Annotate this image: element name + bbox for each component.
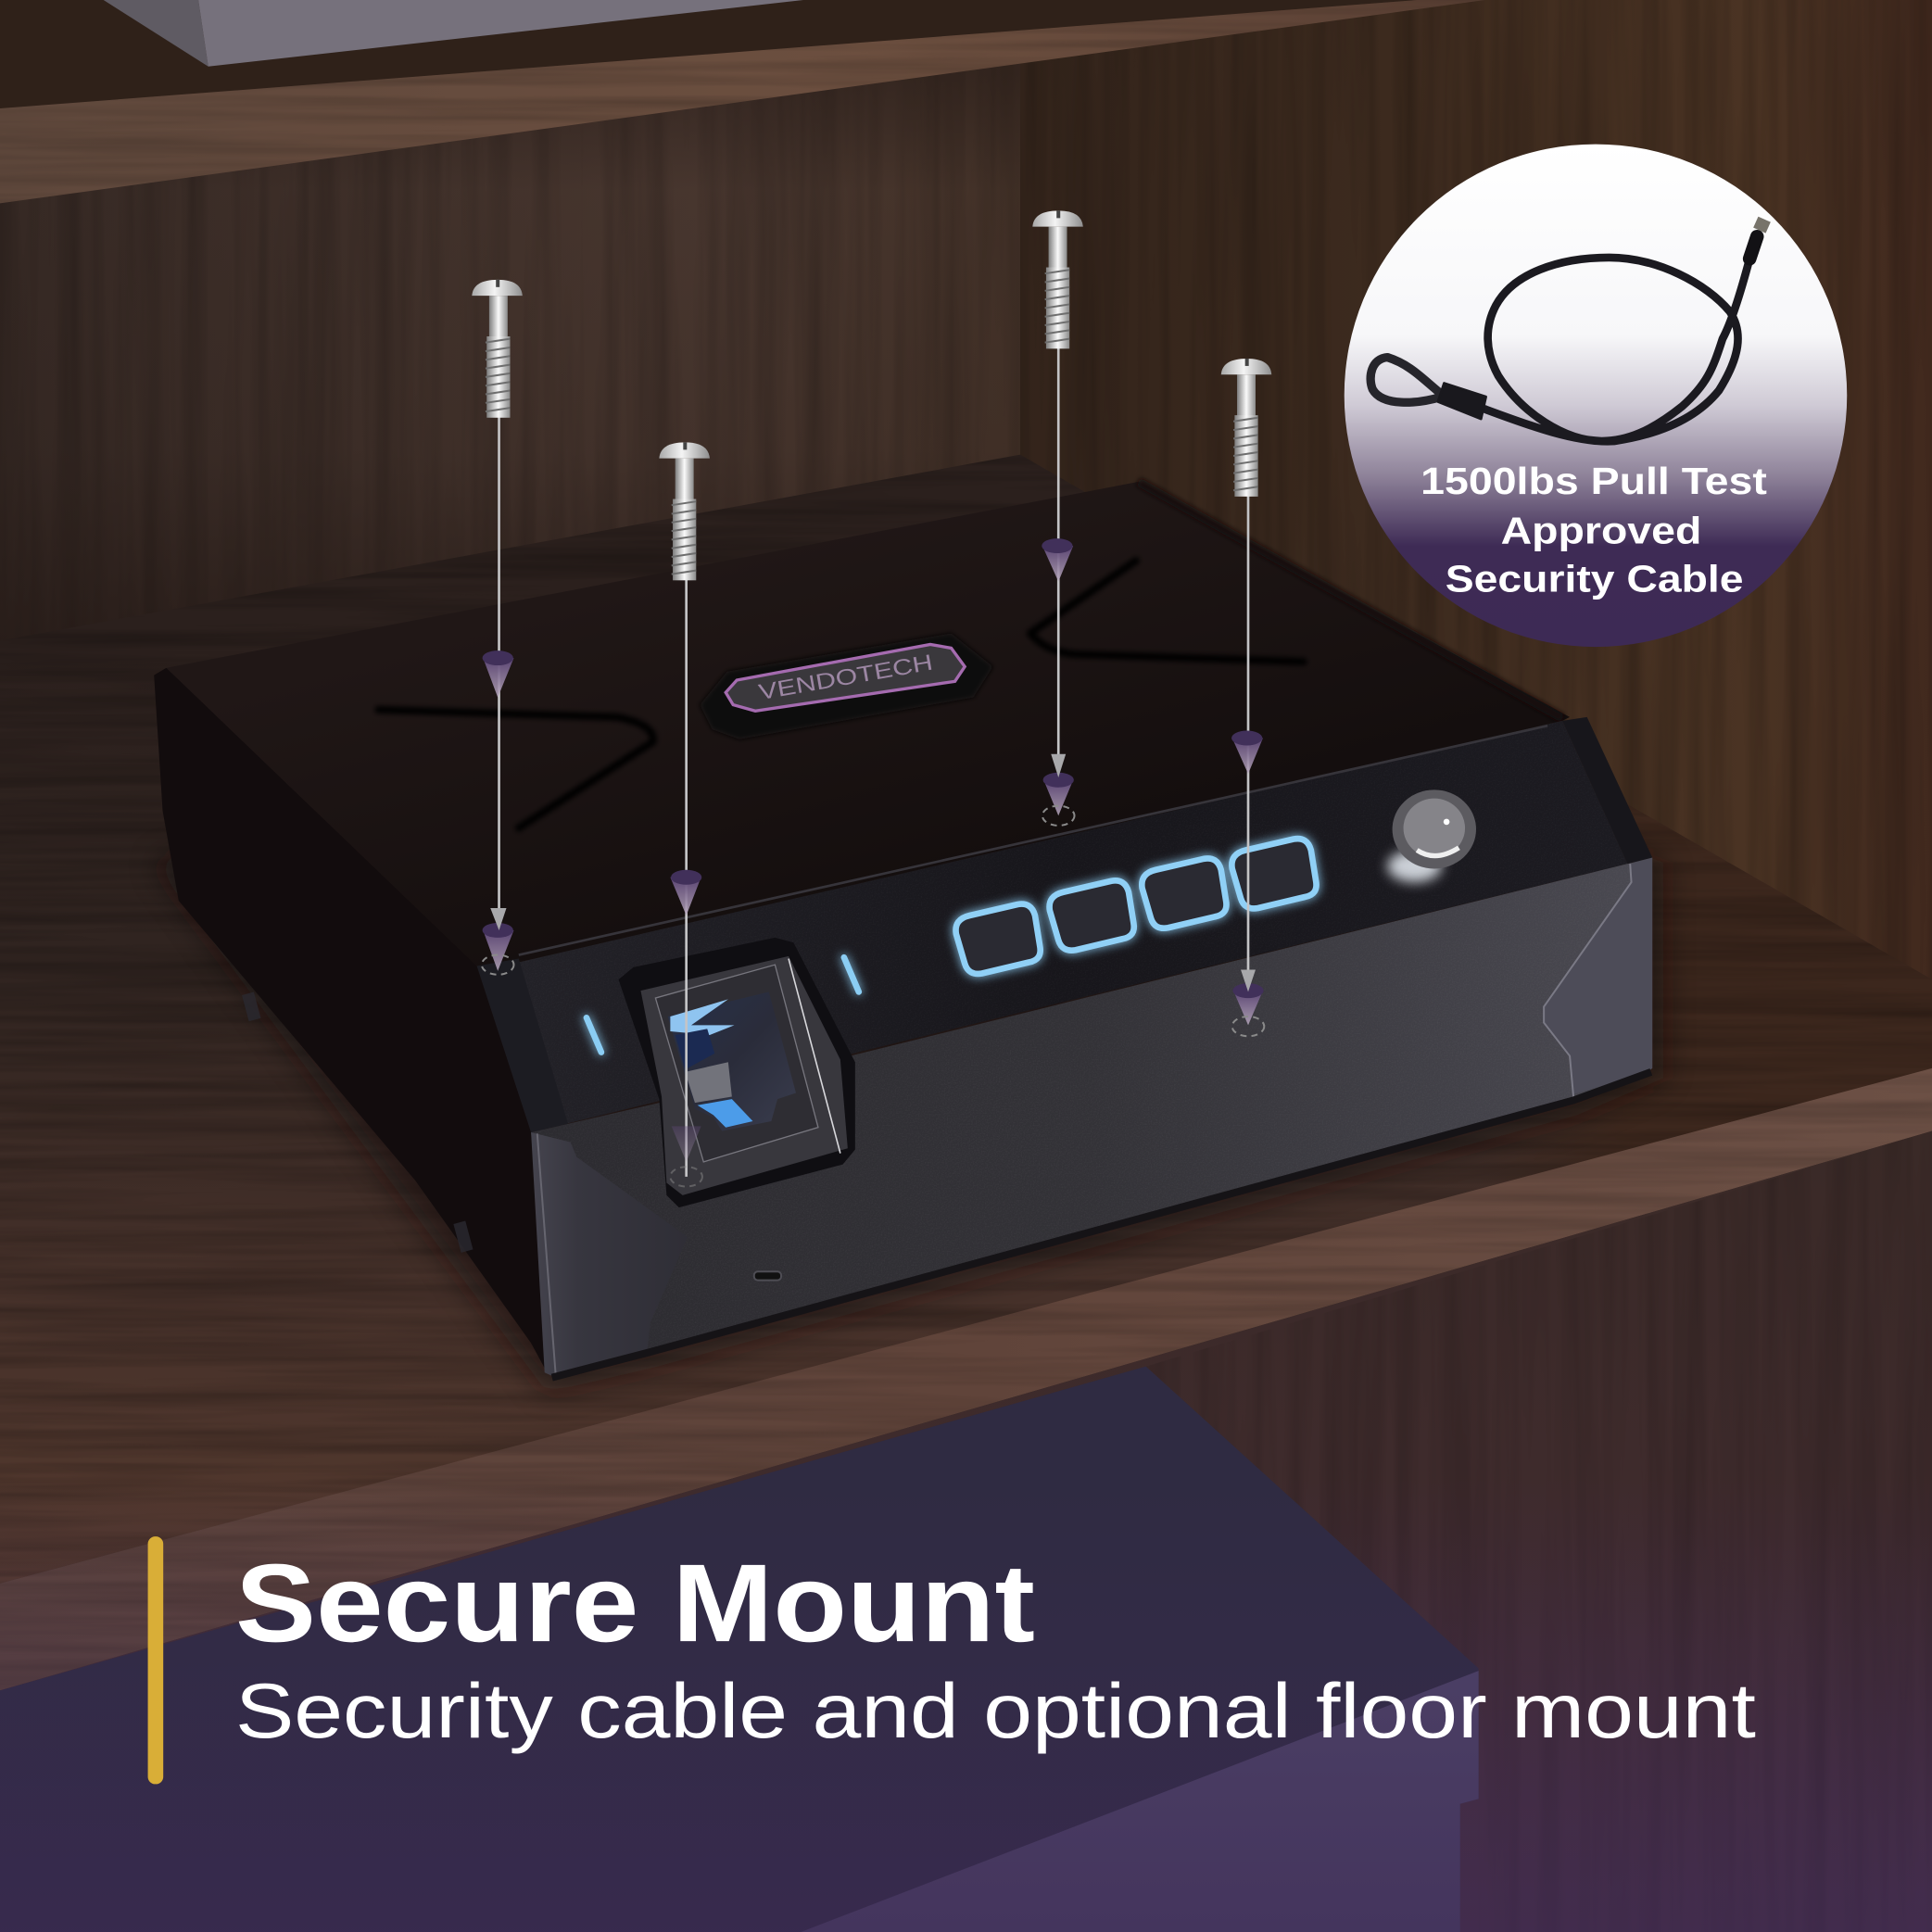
LED bars [587,957,859,1053]
right corner pillar [1562,717,1652,864]
callout text: Approved [1501,509,1701,551]
lower textured panel [531,857,1652,1378]
callout text: Security Cable [1446,557,1744,600]
storage box below shelf [0,1367,1479,1932]
bottom purple fade [0,1479,1932,1932]
right side wall [1020,0,1932,1023]
bottom base [552,1072,1651,1378]
brand plate [700,633,993,739]
screw 4 with guide [1221,359,1271,1036]
shelf floor [0,455,1932,1584]
screw 3 with guide [1032,210,1083,826]
compartment below shelf [0,1131,1932,1932]
screw 1 with guide [472,280,523,975]
embossed marks on lid [378,561,1304,828]
badge circle [1345,145,1847,647]
safe top face [167,482,1570,969]
control strip [486,721,1628,1132]
lip glint [519,726,1547,955]
callout text: 1500lbs Pull Test [1421,460,1767,502]
back wall [0,61,1023,653]
charging port [754,1271,781,1281]
safe shadow on shelf [154,616,1663,1393]
icon: security cable [1370,220,1764,441]
subtitle: Security cable and optional floor mount [235,1667,1756,1754]
left corner pillar [477,959,568,1132]
lower shelf front edge [0,1068,1932,1690]
fingerprint module [619,938,855,1207]
power button [1387,789,1476,882]
brand plate: VENDOTECH [757,650,935,705]
title: Secure Mount [235,1542,1035,1665]
screw 2 with guide [659,442,710,1187]
right corner trim [1544,857,1652,1094]
left corner trim [531,1132,688,1378]
top shelf [0,0,1417,108]
biometric safe [154,482,1652,1378]
accent bar [148,1536,163,1784]
keypad buttons [956,839,1317,974]
callout: security cable [1345,145,1847,647]
callout text [1421,460,1767,600]
side tabs [242,992,473,1253]
safe left side [154,668,547,1372]
